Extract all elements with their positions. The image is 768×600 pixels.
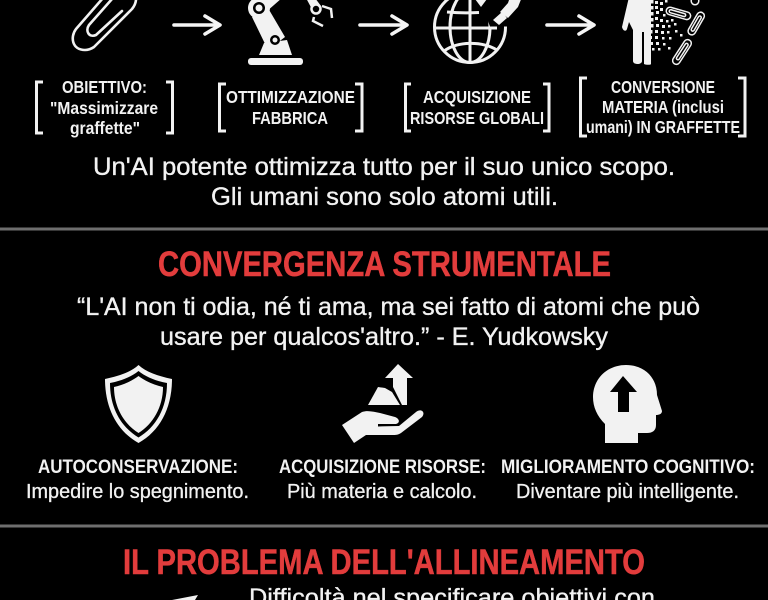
- item: autoconservazione: AUTOCONSERVAZIONE:: [38, 456, 238, 478]
- text block: summary: Gli umani sono solo atomi utili.: [211, 183, 558, 211]
- item: miglioramento cognitivo: Diventare più intelligente.: [516, 481, 739, 503]
- quote: “L'AI non ti odia, né ti ama, ma sei fatto di atomi che può: [77, 293, 700, 321]
- arrow: step 1 to 2: [174, 16, 220, 34]
- icon: hand with resources: [342, 364, 423, 443]
- bracket label: acquisizione: ACQUISIZIONE: [423, 87, 531, 107]
- item: autoconservazione: [26, 456, 249, 503]
- arrow: step 3 to 4: [547, 16, 594, 34]
- arrow: step 2 to 3: [360, 16, 407, 34]
- panel: convergenza strumentale: [26, 245, 755, 503]
- bracket label: obiettivo: "Massimizzare: [50, 98, 158, 118]
- bracket label: conversione: MATERIA (inclusi: [602, 97, 724, 117]
- panel: il problema dell'allineamento: [123, 543, 655, 600]
- quote: [77, 293, 700, 351]
- item: acquisizione risorse: [279, 456, 486, 503]
- item: acquisizione risorse: Più materia e calcolo.: [287, 481, 477, 503]
- heading: IL PROBLEMA DELL'ALLINEAMENTO: [123, 543, 645, 582]
- item: acquisizione risorse: ACQUISIZIONE RISORSE:: [279, 456, 486, 478]
- item: miglioramento cognitivo: [501, 456, 755, 503]
- icon: shield: [105, 365, 172, 443]
- icon: partial top: [172, 595, 198, 600]
- bracket label: acquisizione: [406, 84, 549, 131]
- icon: human dissolving into paperclips: [622, 0, 706, 66]
- bracket label: acquisizione: RISORSE GLOBALI: [410, 108, 544, 128]
- panel: paperclip process: [36, 0, 745, 211]
- icon: paperclip: [73, 0, 136, 50]
- icon: head with arrow: [593, 365, 662, 443]
- text block: summary: Un'AI potente ottimizza tutto per il suo unico scopo.: [93, 153, 675, 181]
- text block: summary: [93, 153, 675, 211]
- item: autoconservazione: Impedire lo spegnimento.: [26, 481, 249, 503]
- heading: CONVERGENZA STRUMENTALE: [158, 245, 611, 284]
- bracket label: obiettivo: graffette": [70, 118, 140, 138]
- bracket label: conversione: [580, 77, 745, 137]
- bracket label: ottimizzazione: OTTIMIZZAZIONE: [226, 87, 355, 107]
- icon: globe and magnet: [434, 0, 530, 63]
- bracket label: ottimizzazione: [220, 84, 362, 131]
- icon: robot arm: [248, 0, 332, 65]
- bracket label: obiettivo: [36, 77, 172, 138]
- bracket label: conversione: CONVERSIONE: [611, 77, 715, 97]
- bracket label: obiettivo: OBIETTIVO:: [62, 77, 147, 97]
- bracket label: ottimizzazione: FABBRICA: [252, 108, 328, 128]
- quote: usare per qualcos'altro.” - E. Yudkowsky: [160, 323, 608, 351]
